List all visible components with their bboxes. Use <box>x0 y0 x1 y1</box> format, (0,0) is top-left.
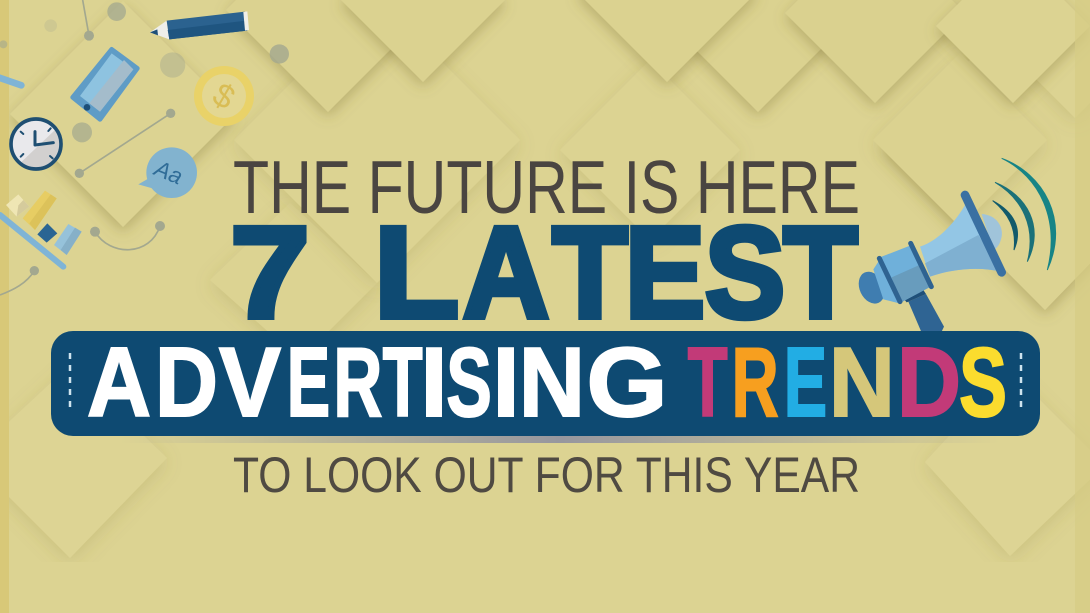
banner: Advertising Trends <box>51 327 1040 443</box>
title line: The Future Is Here: THE FUTURE IS HERE <box>233 145 860 229</box>
icon: speech bubble Aa <box>138 147 197 198</box>
word: Trends: N <box>829 327 895 437</box>
word: Advertising: G <box>586 327 668 437</box>
icon: clock <box>11 119 61 169</box>
word: Advertising: I <box>492 327 520 437</box>
bands and rim <box>879 195 1002 302</box>
word: Advertising: A <box>87 327 151 437</box>
icon: bar chart <box>0 191 82 267</box>
icon: dollar coin: $ <box>206 76 241 117</box>
headline: 7 Latest: L <box>374 201 459 345</box>
headline: 7 Latest: A <box>463 201 549 345</box>
word: Trends: E <box>784 327 827 437</box>
word: Advertising: E <box>287 327 330 437</box>
word: Trends: S <box>959 327 1007 437</box>
word: Trends: D <box>897 327 961 437</box>
word: Advertising: D <box>155 327 218 437</box>
word: Advertising: N <box>519 327 585 437</box>
icon: megaphone <box>854 158 1056 335</box>
word: Advertising: S <box>446 327 492 437</box>
icon: smartphone <box>73 49 137 119</box>
word: Advertising: I <box>420 327 448 437</box>
word: Trends: T <box>688 327 728 437</box>
headline: 7 Latest <box>230 201 858 345</box>
headline: 7 Latest: 7 <box>230 201 310 345</box>
body <box>873 245 931 303</box>
word: Advertising: R <box>333 327 382 437</box>
headline: 7 Latest: T <box>784 201 858 345</box>
horn <box>920 203 1002 277</box>
icon: cropped blue bar <box>0 77 21 85</box>
icon: dollar coin <box>194 66 254 126</box>
connector dots and lines <box>0 0 289 295</box>
word: Advertising: T <box>383 327 423 437</box>
subtitle: To Look Out For This Year: TO LOOK OUT FOR THIS YEAR <box>233 447 860 503</box>
icon cluster: floating marketing icons <box>0 0 289 295</box>
handle <box>908 294 944 335</box>
icon: speech bubble Aa: Aa <box>149 154 187 189</box>
word: Advertising <box>87 327 668 437</box>
headline: 7 Latest: E <box>625 201 705 345</box>
icon: pencil <box>150 11 249 39</box>
word: Trends <box>688 327 1007 437</box>
back cap <box>854 267 890 308</box>
headline: 7 Latest: T <box>552 201 628 345</box>
sound waves <box>993 158 1056 270</box>
word: Advertising: V <box>219 327 281 437</box>
word: Trends: R <box>732 327 779 437</box>
headline: 7 Latest: S <box>705 201 785 345</box>
